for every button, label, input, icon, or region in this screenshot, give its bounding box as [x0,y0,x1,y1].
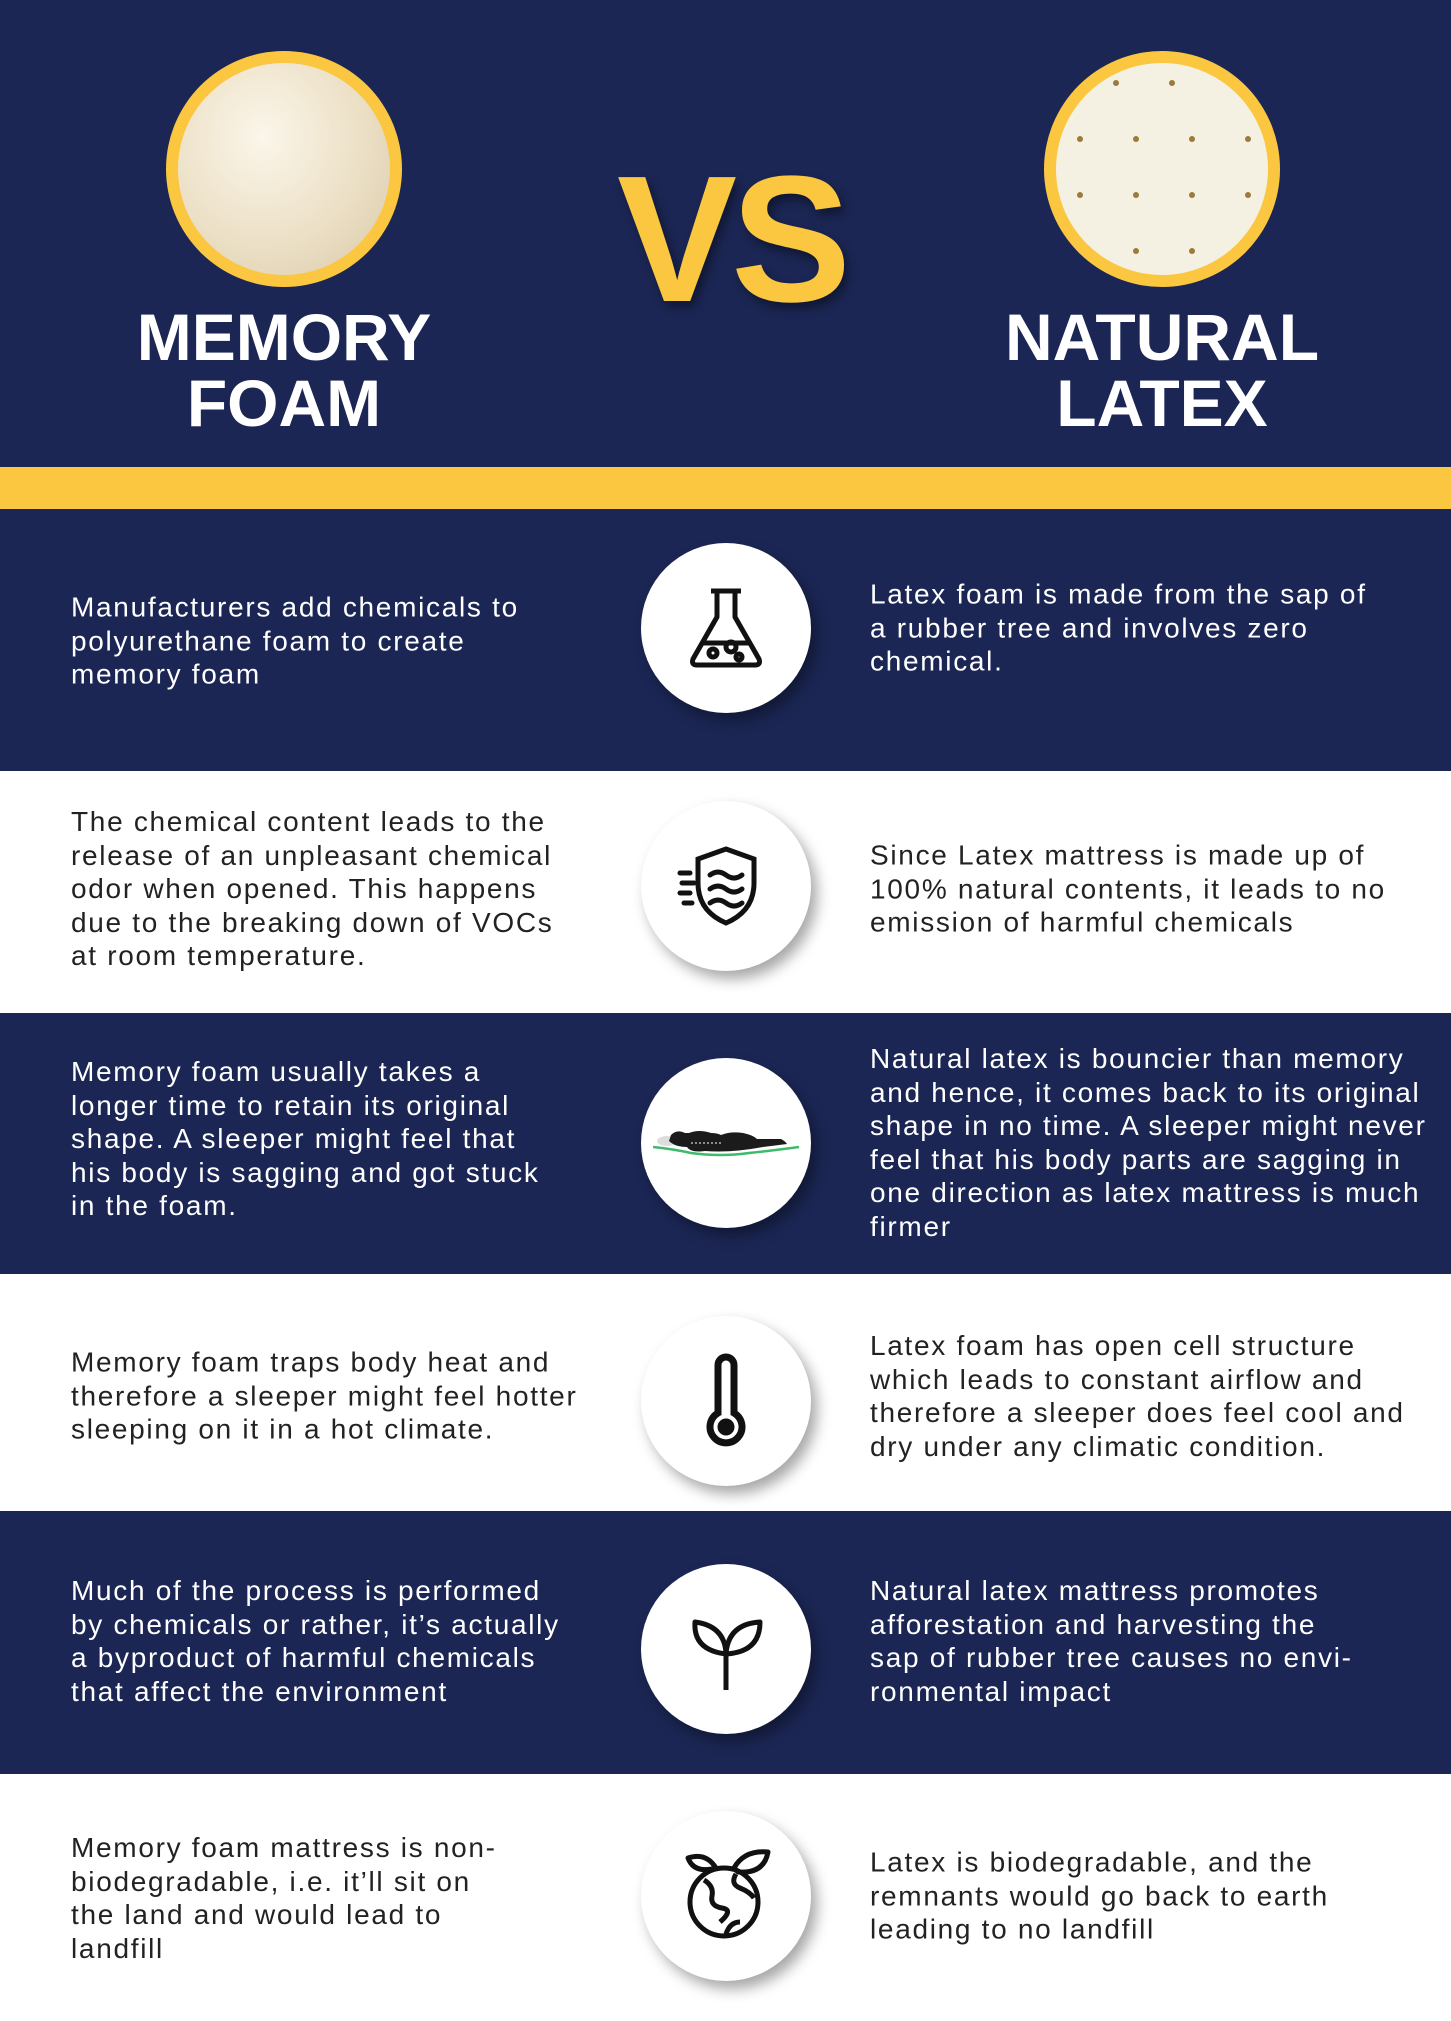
text: memory foam odor: due to the breaking down of VOCs [71,907,553,938]
text: latex afforestation [870,1575,1353,1707]
text: memory foam landfill: Memory foam mattress is non- [71,1832,497,1863]
text: latex no emissions: 100% natural contents, it leads to no [870,873,1386,904]
text: memory foam chemicals: memory foam [71,659,261,690]
icon: shield [641,801,811,971]
text: latex bouncy [870,1043,1427,1242]
text: memory foam sagging: Memory foam usually takes a [71,1056,481,1087]
text: latex cool: therefore a sleeper does feel cool and [870,1397,1405,1428]
row 5: environment [0,1511,1451,1774]
row 2: odor [71,800,1386,988]
text: latex cool: which leads to constant airflow and [870,1363,1364,1394]
text: latex cool [870,1330,1405,1462]
text: latex natural sap: chemical. [870,646,1004,677]
row 4: heat [71,1316,1405,1502]
text: latex bouncy: shape in no time. A sleeper might never [870,1110,1427,1141]
text: latex cool: dry under any climatic condition. [870,1431,1326,1462]
text: latex natural sap: Latex foam is made from the sap of [870,579,1367,610]
text: latex biodegradable: Latex is biodegradable, and the [870,1847,1313,1878]
icon: thermometer [641,1316,811,1486]
text: latex bouncy: feel that his body parts are sagging in [870,1144,1402,1175]
title: VS: VS [617,139,845,340]
header panel [0,0,1451,467]
text: memory foam landfill: landfill [71,1933,164,1964]
text: memory foam chemicals: Manufacturers add chemicals to [71,592,519,623]
title: natural latex: LATEX [1056,366,1268,440]
text: memory foam odor [71,806,553,971]
title: memory foam: FOAM [187,366,381,440]
text: memory foam odor: The chemical content leads to the [71,806,546,837]
text: memory foam harmful process: by chemicals or rather, it’s actually [71,1608,560,1639]
text: memory foam landfill: biodegradable, i.e. it’ll sit on [71,1865,471,1896]
text: memory foam odor: odor when opened. This happens [71,873,537,904]
text: latex biodegradable: remnants would go back to earth [870,1880,1329,1911]
text: latex bouncy: and hence, it comes back to its original [870,1077,1420,1108]
text: memory foam heat: sleeping on it in a hot climate. [71,1414,494,1445]
icon: sleeper [641,1058,811,1228]
text: latex natural sap [870,579,1367,677]
text: latex biodegradable: leading to no landfill [870,1914,1155,1945]
text: memory foam sagging: in the foam. [71,1190,238,1221]
text: memory foam sagging: his body is sagging and got stuck [71,1157,540,1188]
text: memory foam chemicals [71,592,519,690]
text: memory foam chemicals: polyurethane foam to create [71,625,466,656]
title: memory foam [137,300,431,440]
text: memory foam harmful process: that affect the environment [71,1676,448,1707]
text: latex biodegradable [870,1847,1329,1945]
text: memory foam sagging: longer time to retain its original [71,1090,510,1121]
text: memory foam landfill [71,1832,497,1964]
text: latex cool: Latex foam has open cell structure [870,1330,1356,1361]
text: memory foam odor: release of an unpleasant chemical [71,840,552,871]
row 6: biodegradability [71,1810,1329,1998]
text: memory foam landfill: the land and would lead to [71,1899,442,1930]
text: latex no emissions: emission of harmful chemicals [870,907,1294,938]
title: natural latex: NATURAL [1005,300,1319,374]
text: memory foam heat: therefore a sleeper might feel hotter [71,1380,577,1411]
text: memory foam harmful process: a byproduct of harmful chemicals [71,1642,536,1673]
text: memory foam heat [71,1347,577,1445]
text: memory foam sagging [71,1056,540,1221]
text: latex no emissions [870,840,1386,938]
text: memory foam odor: at room temperature. [71,940,366,971]
text: latex bouncy: Natural latex is bouncier than memory [870,1043,1404,1074]
text: latex natural sap: a rubber tree and involves zero [870,612,1309,643]
yellow band [0,467,1451,509]
text: memory foam harmful process: Much of the process is performed [71,1575,541,1606]
text: memory foam sagging: shape. A sleeper might feel that [71,1123,516,1154]
image: latex circle [1044,51,1280,287]
title: natural latex [1005,300,1319,440]
text: memory foam heat: Memory foam traps body heat and [71,1347,550,1378]
icon: earth [641,1811,811,1981]
text: latex bouncy: one direction as latex mattress is much [870,1178,1420,1209]
icon: plant [641,1564,811,1734]
text: latex afforestation: afforestation and harvesting the [870,1608,1316,1639]
text: latex no emissions: Since Latex mattress is made up of [870,840,1365,871]
text: latex afforestation: ronmental impact [870,1676,1112,1707]
text: memory foam harmful process [71,1575,560,1707]
text: latex afforestation: Natural latex mattress promotes [870,1575,1320,1606]
image: memory foam circle [166,51,402,287]
row 1: chemicals [0,509,1451,771]
text: latex afforestation: sap of rubber tree causes no envi- [870,1642,1353,1673]
text: latex bouncy: firmer [870,1211,952,1242]
icon: flask [641,543,811,713]
row 3: shape retention [0,1013,1451,1274]
title: memory foam: MEMORY [137,300,431,374]
